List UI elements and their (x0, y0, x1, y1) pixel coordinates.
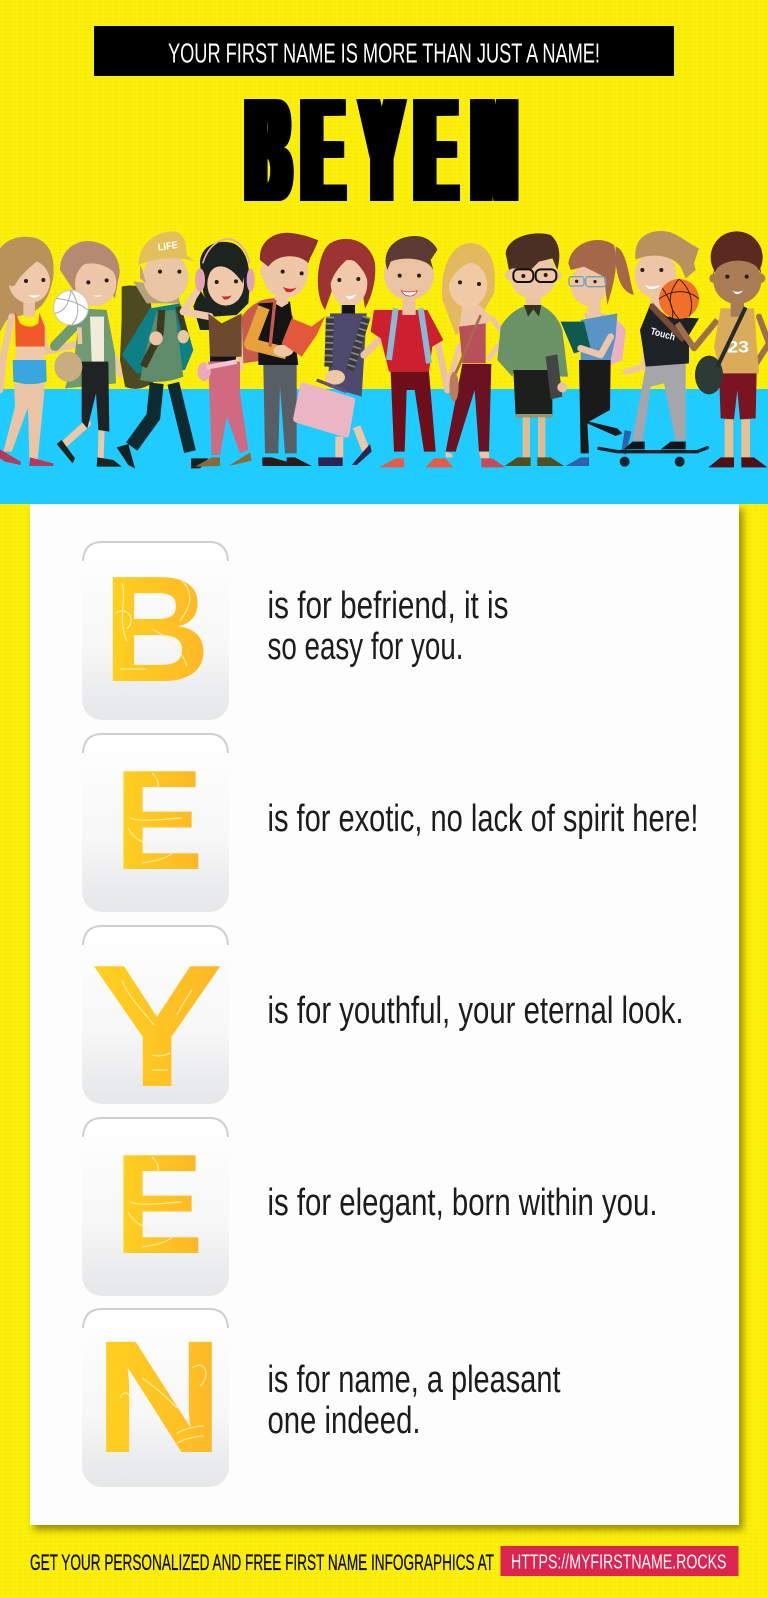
character: boy with glasses (497, 233, 568, 466)
character: girl with pink bag (293, 239, 375, 466)
top banner heading (94, 26, 674, 76)
character: hiker in cap with backpack: LIFE (157, 240, 179, 254)
icon: letter E tile (82, 733, 229, 912)
text: N meaning: one indeed. (268, 1400, 420, 1442)
title: name BEYEN (244, 68, 519, 233)
footer text: GET YOUR PERSONALIZED AND FREE FIRST NAME INFOGRAPHICS AT (30, 1550, 494, 1575)
text: N meaning (268, 1359, 561, 1442)
text: B meaning: is for befriend, it is (268, 585, 508, 627)
icon: letter B tile: B (103, 544, 210, 713)
character: girl with ponytail and tablet (561, 240, 634, 466)
character: girl in green jacket (54, 241, 122, 467)
icon: letter N tile: N (94, 1308, 224, 1487)
title: name BEYEN: E (417, 68, 454, 233)
character: hiker in cap with backpack (117, 231, 208, 468)
row: letter Y (82, 925, 684, 1123)
character: boy in tank top: 23 (727, 338, 749, 357)
icon: letter B tile (82, 541, 229, 720)
icon: letter E tile (82, 1117, 229, 1296)
title: name BEYEN: N (474, 68, 515, 233)
icon: volleyball (54, 290, 88, 325)
icon: letter E tile: E (114, 741, 204, 900)
icon: letter E tile: E (114, 1125, 204, 1284)
character: blonde girl (442, 243, 506, 467)
row: letter B (82, 541, 508, 720)
icon: basketball (659, 279, 699, 319)
panel: letter meanings (30, 504, 738, 1525)
character: boy in tank top (677, 231, 768, 467)
illustration: row of twelve students (0, 231, 768, 468)
text: E meaning: is for elegant, born within you. (268, 1182, 658, 1224)
character: boy in red shirt (364, 236, 453, 467)
floor band (0, 389, 768, 504)
title: name BEYEN: E (304, 68, 341, 233)
title: name BEYEN: Y (363, 68, 401, 233)
text: B meaning: so easy for you. (268, 626, 464, 668)
character: skateboarder (599, 231, 707, 467)
text: B meaning (268, 585, 508, 668)
row: letter E (82, 733, 698, 912)
character: boy reading a book (242, 233, 325, 466)
row: letter N (82, 1308, 561, 1487)
footer: call to action (30, 1546, 738, 1576)
character: girl with headphones (183, 239, 255, 467)
text: N meaning: is for name, a pleasant (268, 1359, 561, 1401)
link button (500, 1546, 738, 1576)
character: skateboarder: Touch (649, 326, 676, 343)
character: girl with volleyball (0, 237, 78, 466)
title: name BEYEN: B (248, 68, 288, 233)
row: letter E second (82, 1117, 658, 1296)
icon: letter Y tile: Y (91, 929, 223, 1123)
